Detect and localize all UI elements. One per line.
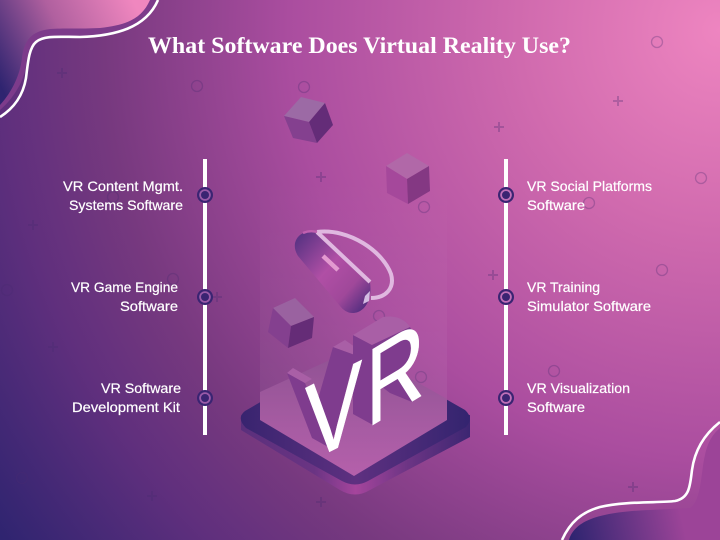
icon: cube right xyxy=(386,153,430,204)
label: VR Training Simulator Software: VR Training xyxy=(527,279,600,295)
label: VR Social Platforms Software: Software xyxy=(527,197,585,213)
top-left corner wave xyxy=(0,0,158,117)
label: VR Social Platforms Software xyxy=(527,178,652,213)
title: What Software Does Virtual Reality Use? xyxy=(148,33,571,58)
label: VR Visualization Software: VR Visualization xyxy=(527,380,630,396)
icon: cube lower xyxy=(268,298,314,348)
marker xyxy=(498,187,514,203)
label: VR Game Engine Software: Software xyxy=(120,298,178,314)
label: VR Training Simulator Software xyxy=(527,279,651,314)
left timeline xyxy=(197,159,213,435)
V extrusion xyxy=(287,340,362,448)
letter R: R xyxy=(366,294,425,453)
label: VR Visualization Software: Software xyxy=(527,399,585,415)
label: VR Game Engine Software: VR Game Engine xyxy=(71,279,178,295)
marker xyxy=(498,289,514,305)
label: VR Game Engine Software xyxy=(71,279,178,314)
icon: cube top xyxy=(284,97,333,143)
label: VR Social Platforms Software: VR Social Platforms xyxy=(527,178,652,194)
marker xyxy=(197,289,213,305)
label: VR Visualization Software xyxy=(527,380,630,415)
label: VR Content Mgmt. Systems Software: Systems Software xyxy=(69,197,183,213)
icon: VR headset xyxy=(295,231,392,313)
bottom-right corner wave xyxy=(562,422,720,540)
label: VR Software Development Kit xyxy=(72,380,181,415)
label: VR Content Mgmt. Systems Software: VR Content Mgmt. xyxy=(63,178,183,194)
light pillar xyxy=(260,175,447,476)
marker xyxy=(197,390,213,406)
marker xyxy=(498,390,514,406)
marker xyxy=(197,187,213,203)
label: VR Training Simulator Software: Simulator Software xyxy=(527,298,651,314)
VR 3D lettering xyxy=(287,294,425,487)
letter V: V xyxy=(305,336,362,487)
right timeline xyxy=(498,159,514,435)
isometric platform xyxy=(241,351,470,494)
label: VR Software Development Kit: Development Kit xyxy=(72,399,180,415)
label: VR Software Development Kit: VR Software xyxy=(101,380,181,396)
R extrusion xyxy=(353,317,415,425)
label: VR Content Mgmt. Systems Software xyxy=(63,178,183,213)
